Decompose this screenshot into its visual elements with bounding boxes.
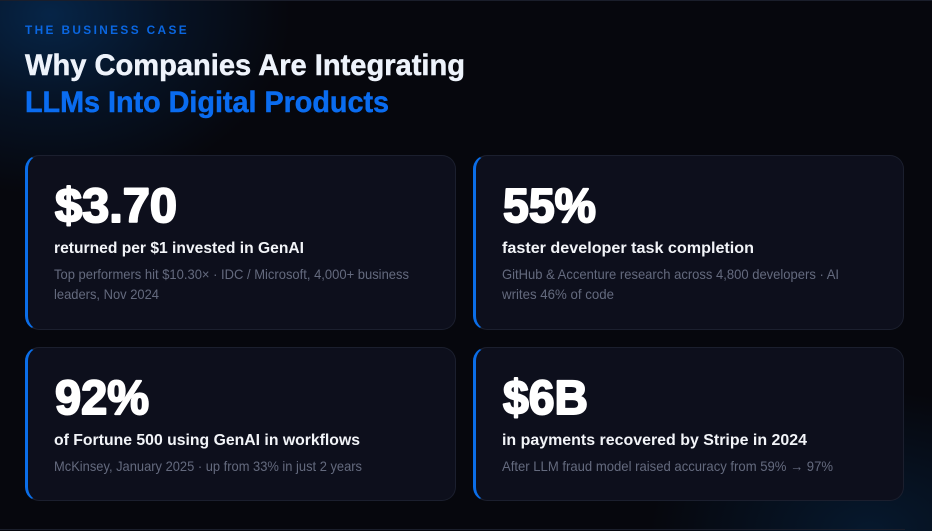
label: returned per $1: returned per $1 invested in GenAI [54, 240, 304, 257]
source note line 2: leaders, Nov 2024 [54, 286, 159, 302]
stat: 55%: 55% [503, 180, 596, 233]
panel: 55% faster [473, 155, 904, 330]
label: of Fortune 500: of Fortune 500 using GenAI in workflows [54, 432, 360, 449]
eyebrow: the business case: THE BUSINESS CASE [25, 23, 189, 37]
source note: McKinsey, January 2025 · up from 33% in just 2 years [54, 458, 362, 474]
source note line 2: writes 46% of code [501, 286, 614, 302]
source note: After LLM fraud model raised accuracy from 59% → 97% [502, 458, 833, 474]
title line 2: LLMs Into Digital Products [25, 86, 389, 119]
title line 1: Why Companies Are Integrating [25, 49, 465, 82]
stat: 92%: 92% [55, 372, 149, 425]
stat: $6B: $6B [503, 372, 588, 425]
source note: Top performers hit $10.30× · IDC / Microsoft, 4,000+ business [54, 266, 409, 282]
panel: $6B recovered [473, 347, 904, 501]
panel: 92% Fortune 500 [25, 347, 456, 501]
label: payments recovered: in payments recovered by Stripe in 2024 [502, 432, 807, 449]
stat: $3.70: $3.70 [55, 180, 177, 233]
source note: GitHub & Accenture research across 4,800 developers · AI [502, 266, 839, 282]
label: faster developer: faster developer task completion [502, 240, 754, 257]
panel: $3.70 return [25, 155, 456, 330]
